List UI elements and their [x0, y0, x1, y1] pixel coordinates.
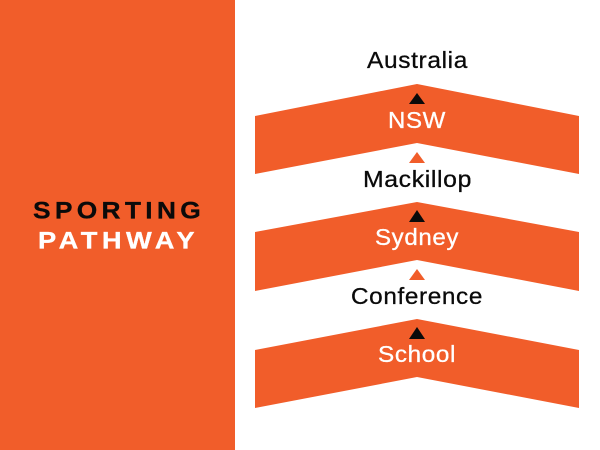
label: Conference: Conference [351, 283, 483, 309]
chevron: School [255, 319, 579, 408]
label: Australia: Australia [367, 47, 468, 73]
chevron: NSW [255, 84, 579, 174]
panel: left title panel [0, 0, 235, 450]
icon: black up arrow [409, 210, 425, 222]
icon: black up arrow [409, 93, 425, 104]
label: Sydney: Sydney [375, 224, 459, 250]
heading: pathway: PATHWAY [38, 228, 199, 254]
heading: sporting: SPORTING [33, 198, 205, 224]
label: Mackillop: Mackillop [363, 166, 472, 192]
icon: orange up arrow [409, 269, 425, 280]
label: NSW: NSW [388, 107, 446, 133]
icon: orange up arrow [409, 152, 425, 163]
icon: black up arrow [409, 327, 425, 339]
chevron: Sydney [255, 202, 579, 291]
label: School: School [378, 341, 456, 367]
